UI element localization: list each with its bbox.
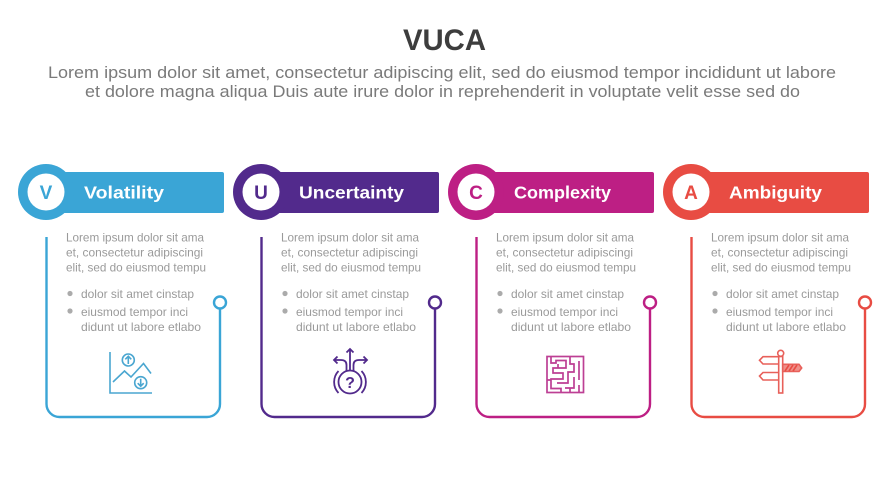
header: ambiguity: Ambiguity [729,182,822,202]
ring marker: volatility [214,296,226,308]
bullet list: volatility: dolor sit amet cinstap [81,287,194,301]
body text: volatility [66,230,206,274]
body text: volatility: elit, sed do eiusmod tempu [66,260,206,274]
ring marker: uncertainty [429,296,441,308]
body text: ambiguity: et, consectetur adipiscingi [711,246,848,260]
body text: complexity: elit, sed do eiusmod tempu [496,260,636,274]
body text: ambiguity: elit, sed do eiusmod tempu [711,260,851,274]
bullet list: uncertainty: dolor sit amet cinstap [296,287,409,301]
bullet list: ambiguity [712,287,846,334]
outline frame: complexity [476,237,650,417]
bullet list: ambiguity: eiusmod tempor inci [726,305,833,319]
header: complexity: Complexity [514,182,611,202]
bullet list: volatility: didunt ut labore etlabo [81,320,201,334]
header: uncertainty: Uncertainty [299,182,404,202]
icon: question mark with three arrows: ? [345,375,355,392]
bullet list: uncertainty [282,287,416,334]
title: VUCA [403,24,486,57]
panel: complexity [448,164,656,417]
body text: volatility: Lorem ipsum dolor sit ama [66,230,204,244]
icon: maze [547,356,584,392]
bullet list: volatility: eiusmod tempor inci [81,305,188,319]
panel: volatility [18,164,226,417]
header: complexity [448,164,654,220]
body text: complexity: et, consectetur adipiscingi [496,246,633,260]
bullet list: ambiguity: dolor sit amet cinstap [726,287,839,301]
bullet list: complexity [497,287,631,334]
panel: ambiguity [663,164,871,417]
bullet list: volatility [67,287,201,334]
icon: question mark with three arrows [334,349,367,394]
subtitle [48,63,836,101]
outline frame: ambiguity [692,237,865,417]
body text: uncertainty [281,230,421,274]
panel: uncertainty [233,164,441,417]
header: ambiguity [663,164,869,220]
bullet list: complexity: didunt ut labore etlabo [511,320,631,334]
outline frame: volatility [46,237,220,417]
ring marker: complexity [644,296,656,308]
outline frame: uncertainty [262,237,435,417]
subtitle: et dolore magna aliqua Duis aute irure dolor in reprehenderit in voluptate velit esse sed do [85,82,800,101]
body text: complexity: Lorem ipsum dolor sit ama [496,230,634,244]
body text: ambiguity: Lorem ipsum dolor sit ama [711,230,849,244]
bullet list: ambiguity: didunt ut labore etlabo [726,320,846,334]
bullet list: uncertainty: didunt ut labore etlabo [296,320,416,334]
body text: uncertainty: et, consectetur adipiscingi [281,246,418,260]
body text: uncertainty: Lorem ipsum dolor sit ama [281,230,419,244]
header: volatility [18,164,224,220]
header: complexity: C [469,183,483,204]
icon: chart with up and down arrows [110,352,152,393]
header: ambiguity: A [684,183,698,204]
icon: signpost [760,350,802,393]
header: volatility: Volatility [84,182,164,202]
body text: uncertainty: elit, sed do eiusmod tempu [281,260,421,274]
header: uncertainty [233,164,439,220]
bullet list: complexity: eiusmod tempor inci [511,305,618,319]
ring marker: ambiguity [859,296,871,308]
header: volatility: V [40,183,53,204]
body text: volatility: et, consectetur adipiscingi [66,246,203,260]
header: uncertainty: U [254,183,268,204]
bullet list: uncertainty: eiusmod tempor inci [296,305,403,319]
bullet list: complexity: dolor sit amet cinstap [511,287,624,301]
subtitle: Lorem ipsum dolor sit amet, consectetur adipiscing elit, sed do eiusmod tempor incididunt ut labore [48,63,836,82]
body text: complexity [496,230,636,274]
body text: ambiguity [711,230,851,274]
